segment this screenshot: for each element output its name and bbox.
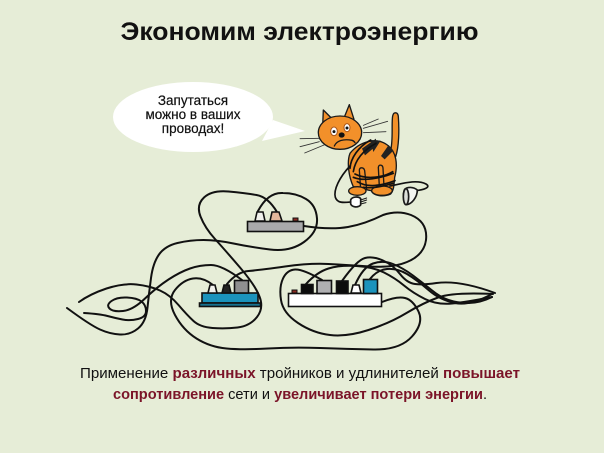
cat mouth [334,140,355,146]
title: Экономим электроэнергию [120,18,478,46]
power strip: gray [248,212,304,232]
caption: сопротивление сети и увеличивает потери энергии. [113,386,487,403]
cat body [348,141,396,196]
cat tangled in wires [300,105,428,207]
cat whiskers [300,119,388,153]
cat head [318,105,362,149]
cat nose [339,132,345,138]
cat eyes [331,124,350,136]
speech bubble: Запутаться [158,93,228,108]
wires around the cat [335,140,428,202]
cat front legs [359,165,384,189]
caption: Применение различных тройников и удлинителей повышает [80,365,520,382]
cat stripes [362,139,393,159]
speech bubble: можно в ваших [146,107,241,122]
power strip: white [288,280,382,306]
speech bubble [113,82,305,152]
caption [80,365,520,403]
plug on the wire [351,197,367,207]
speech bubble: проводах! [162,121,224,136]
power strip: blue [200,280,260,306]
socket on the wire [403,187,417,205]
tangled cables [67,191,495,350]
cat paws [349,186,392,195]
cat tail [391,113,399,157]
